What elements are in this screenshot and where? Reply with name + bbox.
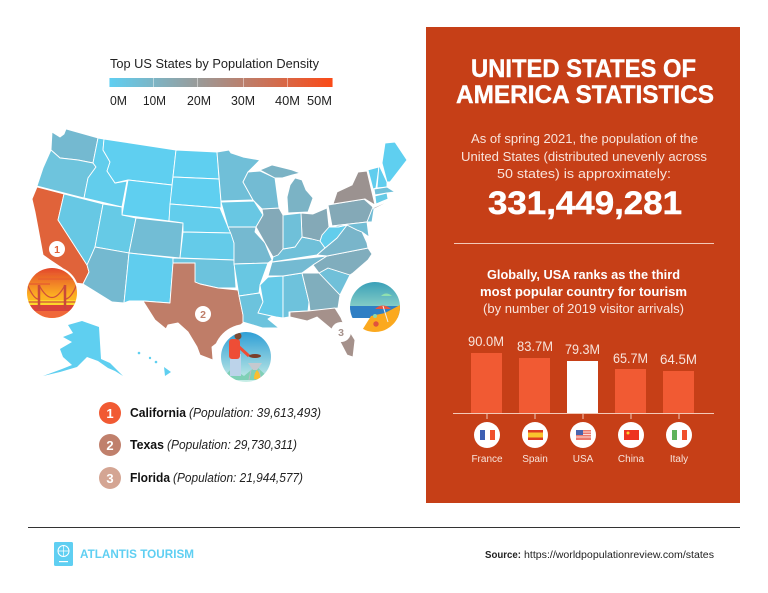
legend labels: 50M <box>307 93 332 108</box>
state: Utah <box>95 204 136 253</box>
state: Montana <box>103 139 176 185</box>
country labels: China <box>618 454 644 465</box>
country labels: Italy <box>670 454 688 465</box>
panel title: AMERICA STATISTICS <box>456 81 714 109</box>
state: Missouri <box>228 227 272 264</box>
ranking text: (by number of 2019 visitor arrivals) <box>483 302 684 316</box>
state: South Carolina <box>319 268 350 295</box>
state: Michigan lower <box>287 178 313 213</box>
state: Michigan upper <box>260 165 300 178</box>
state: New York <box>333 171 375 205</box>
country labels: USA <box>573 454 594 465</box>
source: https://worldpopulationreview.com/states <box>524 550 714 561</box>
US map <box>32 129 407 376</box>
state: Washington <box>51 129 98 163</box>
country labels <box>471 454 688 465</box>
state: Arizona <box>83 247 129 303</box>
list item: Florida: Florida <box>130 471 171 485</box>
state: Maine <box>382 142 407 182</box>
state: Nebraska <box>169 204 231 233</box>
state: New Hampshire <box>377 165 387 188</box>
state: Maryland and Delaware <box>332 222 369 237</box>
panel title: UNITED STATES OF <box>471 55 696 83</box>
bar values <box>468 334 697 367</box>
legend labels <box>110 93 332 108</box>
map badge 2: 2 <box>200 309 206 321</box>
state: California <box>32 187 89 284</box>
state: Louisiana <box>239 293 279 328</box>
state: Vermont <box>368 167 379 189</box>
population number: 331,449,281 <box>488 185 682 221</box>
population intro text <box>461 131 708 181</box>
state: Idaho <box>84 138 127 207</box>
ranking text: Globally, USA ranks as the third <box>487 268 680 282</box>
flag: France <box>474 422 500 448</box>
ranking text: most popular country for tourism <box>480 285 687 299</box>
state: South Dakota <box>170 177 221 208</box>
map badge 1: 1 <box>54 244 60 256</box>
state: Arkansas <box>234 263 268 296</box>
list item: Texas: 2 <box>106 438 114 453</box>
white halos around scene circles <box>25 266 411 390</box>
flag: Italy <box>666 422 692 448</box>
state: Alaska <box>43 321 123 376</box>
state: Kentucky <box>272 237 325 262</box>
list item: California: California <box>130 406 187 420</box>
state: New Jersey <box>365 199 374 222</box>
state: Indiana <box>283 213 302 249</box>
state: Massachusetts <box>374 187 395 195</box>
population intro text: 50 states) is approximately: <box>497 166 671 181</box>
population intro text: United States (distributed unevenly across <box>461 149 708 164</box>
state: Virginia <box>317 225 368 256</box>
list item: Florida: 3 <box>106 471 114 486</box>
map legend <box>109 56 333 108</box>
bar values: 64.5M <box>660 352 697 367</box>
bar values: 83.7M <box>517 339 553 354</box>
list item: Texas: (Population: 29,730,311) <box>167 438 297 452</box>
ranked state list <box>99 402 321 489</box>
list item: Texas: Texas <box>130 438 164 452</box>
list item: California: (Population: 39,613,493) <box>189 406 321 420</box>
list item: Texas <box>99 434 297 456</box>
icon: passport <box>54 542 73 566</box>
state: Oregon <box>37 150 96 198</box>
state: Iowa <box>221 201 263 227</box>
bar values: 79.3M <box>565 342 600 357</box>
legend labels: 0M <box>110 93 127 108</box>
list item: Florida <box>99 467 303 489</box>
ranking text <box>480 268 687 316</box>
state: Hawaii <box>138 352 171 376</box>
list item: California: 1 <box>106 406 114 421</box>
population intro text: As of spring 2021, the population of the <box>471 131 698 146</box>
flag: USA <box>570 422 596 448</box>
legend labels: 30M <box>231 93 255 108</box>
state: Mississippi <box>258 276 283 318</box>
legend labels: 10M <box>143 93 166 108</box>
list item: California <box>99 402 321 424</box>
state: Minnesota <box>217 150 260 201</box>
map badge 3: 3 <box>338 327 344 339</box>
state: Long Island <box>373 203 384 209</box>
legend labels: 40M <box>275 93 300 108</box>
bar values: 65.7M <box>613 351 648 366</box>
state: Texas <box>143 263 243 360</box>
state: North Carolina <box>313 248 372 275</box>
map badge 1 <box>49 241 65 257</box>
scene: man at grill <box>221 332 271 382</box>
state: Pennsylvania <box>328 199 373 226</box>
legend gradient bar <box>109 78 333 87</box>
state: Tennessee <box>268 256 327 276</box>
bar chart <box>453 334 714 465</box>
flag: China <box>618 422 644 448</box>
bar values: 90.0M <box>468 334 504 349</box>
flag: Spain <box>522 422 548 448</box>
state: Wisconsin <box>243 171 279 209</box>
country labels: France <box>471 454 503 465</box>
state: Wyoming <box>122 180 172 221</box>
source: Source: <box>485 550 521 561</box>
state: Florida <box>290 308 355 357</box>
scene: beach <box>350 282 400 332</box>
panel: statistics <box>426 27 740 503</box>
state: Alabama <box>283 273 309 318</box>
scene: Golden Gate bridge <box>27 268 77 318</box>
state: Ohio <box>301 208 329 241</box>
state: West Virginia <box>320 225 347 248</box>
logo: Atlantis Tourism <box>54 542 194 566</box>
country labels: Spain <box>522 454 548 465</box>
state: Nevada <box>58 194 103 265</box>
map badge 3 <box>333 324 349 340</box>
list item: Florida: (Population: 21,944,577) <box>173 471 303 485</box>
state: Connecticut and Rhode Island <box>375 193 388 204</box>
state: Colorado <box>129 218 183 258</box>
state: Kansas <box>180 232 234 260</box>
logo: Atlantis Tourism: ATLANTIS TOURISM <box>80 549 194 561</box>
legend labels: 20M <box>187 93 211 108</box>
state: Georgia <box>302 273 340 311</box>
state: Oklahoma <box>173 258 236 288</box>
state: New Mexico <box>124 253 173 303</box>
map badge 2 <box>195 306 211 322</box>
state: Illinois <box>256 208 283 257</box>
legend title: Top US States by Population Density <box>110 56 319 71</box>
state: North Dakota <box>173 150 219 179</box>
panel title <box>456 55 714 109</box>
